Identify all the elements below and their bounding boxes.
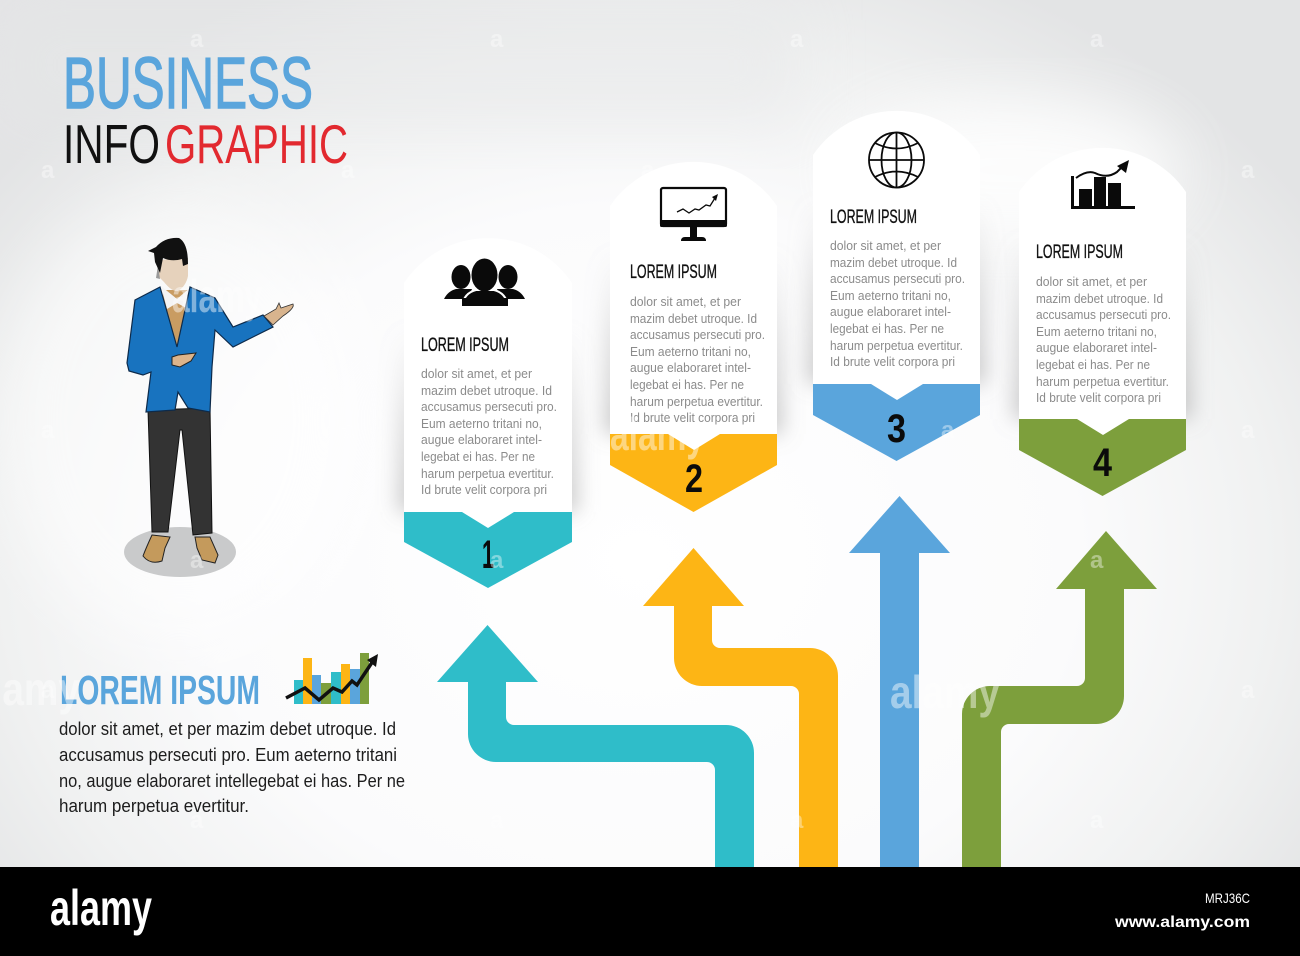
icon: monitor with chart xyxy=(660,188,727,241)
card 4: 4 xyxy=(1093,441,1113,485)
illustration: businessman presenting xyxy=(124,238,293,577)
section paragraph: accusamus persecuti pro. Eum aeterno tritani xyxy=(59,744,397,765)
watermarks: a xyxy=(790,807,804,834)
watermarks: a xyxy=(941,157,955,184)
card 3 xyxy=(807,111,986,461)
card 1: Id brute velit corpora pri xyxy=(421,483,547,497)
card 1: dolor sit amet, et per xyxy=(421,367,532,381)
section paragraph: no, augue elaboraret intellegebat ei has. Per ne xyxy=(59,770,405,791)
icon: growth chart xyxy=(1071,160,1135,209)
watermarks: a xyxy=(1241,417,1255,444)
watermarks: a xyxy=(941,417,955,444)
card 2: dolor sit amet, et per xyxy=(630,295,741,309)
card 2: harum perpetua evertitur. xyxy=(630,395,763,409)
section paragraph xyxy=(59,718,405,816)
card 2: Eum aeterno tritani no, xyxy=(630,345,751,359)
arrow 3: blue xyxy=(849,496,950,867)
image id: MRJ36C xyxy=(1205,890,1250,906)
watermarks: a xyxy=(41,677,55,704)
card 1: mazim debet utroque. Id xyxy=(421,384,552,398)
watermarks: a xyxy=(790,26,804,53)
card 4: augue elaboraret intel- xyxy=(1036,341,1157,355)
card 3: accusamus persecuti pro. xyxy=(830,272,965,286)
card 2: Id brute velit corpora pri xyxy=(630,411,755,425)
card 3: augue elaboraret intel- xyxy=(830,305,951,319)
card 2: mazim debet utroque. Id xyxy=(630,312,757,326)
watermarks: a xyxy=(190,547,204,574)
watermarks: a xyxy=(490,26,504,53)
footer bar xyxy=(0,867,1300,956)
section heading: LOREM IPSUM xyxy=(60,667,260,713)
card 1: harum perpetua evertitur. xyxy=(421,467,554,481)
arrow 4: green xyxy=(962,531,1157,867)
watermarks: a xyxy=(41,157,55,184)
icon: bar chart with trend arrow xyxy=(286,653,378,704)
card 3: Id brute velit corpora pri xyxy=(830,355,955,369)
card 3: dolor sit amet, et per xyxy=(830,239,941,253)
card 3: mazim debet utroque. Id xyxy=(830,256,957,270)
watermarks: a xyxy=(641,157,655,184)
watermarks: a xyxy=(190,26,204,53)
watermarks: a xyxy=(1241,677,1255,704)
card 1: augue elaboraret intel- xyxy=(421,433,542,447)
watermarks: a xyxy=(790,547,804,574)
watermarks: a xyxy=(1090,26,1104,53)
card 4: legebat ei has. Per ne xyxy=(1036,358,1150,372)
footer logo: alamy xyxy=(50,880,152,936)
icon: globe xyxy=(869,132,924,188)
section paragraph: harum perpetua evertitur. xyxy=(59,795,249,816)
arrow 1: teal xyxy=(437,625,754,867)
watermarks: a xyxy=(1241,157,1255,184)
card 1 xyxy=(398,238,578,588)
card 2: augue elaboraret intel- xyxy=(630,361,751,375)
card 2: legebat ei has. Per ne xyxy=(630,378,744,392)
card 2: accusamus persecuti pro. xyxy=(630,328,765,342)
card 1: Eum aeterno tritani no, xyxy=(421,417,542,431)
card 4: Eum aeterno tritani no, xyxy=(1036,325,1157,339)
watermarks: a xyxy=(41,417,55,444)
image id: www.alamy.com xyxy=(1114,914,1250,931)
icon: people xyxy=(444,258,525,306)
card 2 xyxy=(604,162,783,512)
watermarks: a xyxy=(490,547,504,574)
title: BUSINESS xyxy=(63,44,313,124)
title: GRAPHIC xyxy=(165,113,348,175)
card 3: 3 xyxy=(887,407,906,451)
watermarks: alamy xyxy=(890,666,1000,718)
card 4: mazim debet utroque. Id xyxy=(1036,292,1163,306)
card 1: legebat ei has. Per ne xyxy=(421,450,535,464)
watermarks: alamy xyxy=(172,270,262,322)
title: INFO xyxy=(63,113,160,175)
watermarks: a xyxy=(641,677,655,704)
card 4: accusamus persecuti pro. xyxy=(1036,308,1171,322)
card 4: Id brute velit corpora pri xyxy=(1036,391,1161,405)
card 3: Eum aeterno tritani no, xyxy=(830,289,951,303)
watermarks: a xyxy=(341,417,355,444)
watermarks: a xyxy=(341,157,355,184)
card 1: LOREM IPSUM xyxy=(421,335,509,356)
watermarks: alamy xyxy=(610,408,705,460)
card 4 xyxy=(1013,148,1192,496)
image id xyxy=(1114,890,1250,931)
card 4: dolor sit amet, et per xyxy=(1036,275,1147,289)
card 1: accusamus persecuti pro. xyxy=(421,400,557,414)
card 2: 2 xyxy=(685,457,703,501)
section paragraph: dolor sit amet, et per mazim debet utroque. Id xyxy=(59,718,396,739)
card 4: harum perpetua evertitur. xyxy=(1036,375,1169,389)
card 3: legebat ei has. Per ne xyxy=(830,322,944,336)
watermarks: a xyxy=(1090,807,1104,834)
watermarks: a xyxy=(1090,547,1104,574)
arrow 2: yellow xyxy=(643,548,838,867)
card 3: harum perpetua evertitur. xyxy=(830,339,963,353)
card 4: LOREM IPSUM xyxy=(1036,242,1123,263)
card 2: LOREM IPSUM xyxy=(630,262,717,283)
watermarks: a xyxy=(490,807,504,834)
watermarks: a xyxy=(190,807,204,834)
title xyxy=(63,44,348,175)
card 1: 1 xyxy=(482,533,494,577)
card 3: LOREM IPSUM xyxy=(830,207,917,228)
